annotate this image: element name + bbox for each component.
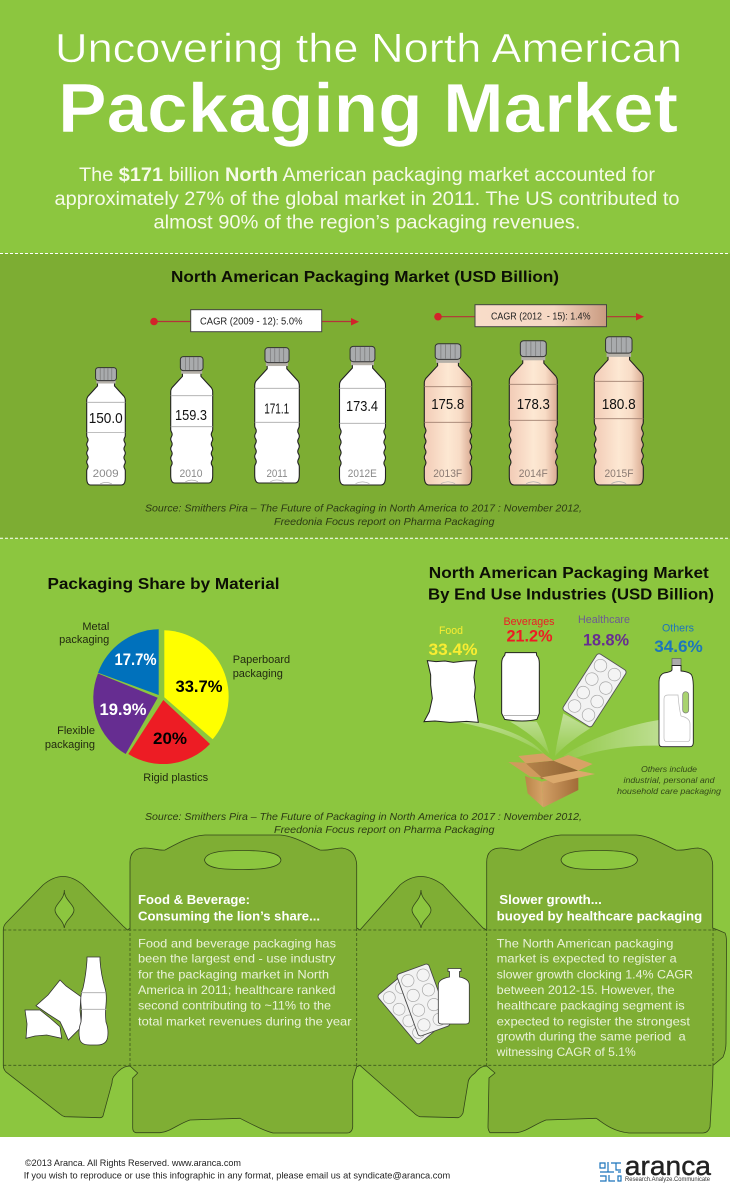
bottle: 2013F (424, 344, 472, 485)
footer (0, 1137, 730, 1200)
source note: market size (145, 502, 582, 528)
others category (654, 623, 703, 747)
bottle: 2013F: 175.8 (431, 396, 464, 413)
intro paragraph: The $171 billion North American packaging market accounted for (79, 165, 656, 186)
note: others include: industrial, personal and (624, 775, 716, 785)
title: Packaging Market (58, 69, 678, 147)
blister front (396, 963, 451, 1037)
icon: pillows and glass bottle (25, 957, 108, 1045)
slice: paperboard (164, 630, 229, 739)
heading: market size: North American Packaging Market (USD Billion) (171, 269, 559, 286)
bottle: 2012E: 2012E (348, 468, 377, 480)
heading: packaging share: Packaging Share by Material (48, 576, 280, 593)
bottle: 2010 (171, 357, 213, 483)
source note: material and end use: Freedonia Focus report on Pharma Packaging (274, 824, 495, 836)
arrow: CAGR 2012-15: CAGR (2012 - 15): 1.4% (491, 312, 591, 322)
pillow front (25, 1010, 62, 1038)
logo: aranca: Research.Analyze.Communicate (625, 1177, 711, 1183)
leaf cut-out left (55, 890, 74, 928)
text block: slower growth: healthcare packaging segment is (497, 998, 685, 1012)
pie chart: share by material: 17.7% (114, 650, 156, 669)
food category: 33.4% (428, 640, 478, 659)
blister back (377, 975, 443, 1045)
bottle: 2014F (509, 341, 557, 485)
pie chart: share by material (93, 629, 229, 764)
footer copyright (24, 1158, 450, 1181)
arrow: CAGR 2009-12: CAGR (2009 - 12): 5.0% (200, 316, 303, 328)
bottle: 2010: 159.3 (175, 407, 207, 424)
bottle: 2012E: 173.4 (346, 398, 378, 415)
bottle: 2015F: 180.8 (602, 396, 636, 413)
vial (438, 968, 469, 1024)
intro paragraph: approximately 27% of the global market in 2011. The US contributed to (54, 189, 680, 210)
icon: detergent bottle (659, 658, 693, 747)
bottle: 2009: 2009 (93, 468, 119, 480)
beverages category: 21.2% (506, 627, 552, 646)
handle cut-out left (204, 850, 281, 870)
pie chart: share by material: 20% (153, 729, 187, 748)
handle cut-out right (561, 850, 638, 870)
pie labels: Flexible (57, 725, 95, 737)
pie labels: packaging (59, 634, 109, 646)
panel: market size band (0, 254, 730, 538)
arrow: CAGR 2009-12 (150, 310, 359, 332)
bottle: 2014F: 178.3 (517, 396, 550, 413)
slice: rigid plastics (128, 700, 210, 764)
heading: end use industries (428, 565, 714, 604)
text block: food and beverage: been the largest end - use industry (138, 952, 336, 966)
intro paragraph: almost 90% of the region’s packaging revenues. (154, 212, 580, 234)
title: Uncovering the North American (55, 25, 682, 71)
text block: food and beverage: for the packaging market in North (138, 967, 329, 981)
pie chart: share by material: 19.9% (100, 700, 146, 719)
text block: slower growth: growth during the same period a (497, 1030, 686, 1044)
footer copyright: If you wish to reproduce or use this infographic in any format, please email us at syndicate@aranca.com (24, 1170, 450, 1181)
beverages category (502, 616, 555, 721)
pillow back (36, 980, 82, 1040)
intro paragraph (54, 165, 680, 234)
note: others include (617, 764, 721, 796)
healthcare category: 18.8% (583, 631, 629, 650)
text block: slower growth: The North American packaging (497, 936, 673, 950)
pie labels: Paperboard (233, 654, 290, 666)
healthcare category: Healthcare (578, 614, 630, 626)
text block: slower growth: expected to register the strongest (497, 1014, 691, 1028)
source note: market size: Source: Smithers Pira – The Future of Packaging in North America to 2017 : November 2012, (145, 502, 582, 514)
text block: slower growth: buoyed by healthcare packaging (497, 910, 702, 924)
food category: Food (439, 625, 463, 637)
panel: carton die-cut shapes (3, 835, 727, 1133)
bottle: 2014F: 2014F (519, 468, 548, 480)
text block: food and beverage: Food and beverage packaging has (138, 936, 336, 950)
title (55, 25, 682, 147)
source note: material and end use (145, 811, 582, 836)
bottle: 2009 (87, 368, 125, 485)
bottle: 2015F: 2015F (604, 468, 634, 480)
leaf cut-out right (412, 890, 431, 928)
pie labels (45, 621, 290, 784)
text block: food and beverage: America in 2011; healthcare ranked (138, 983, 336, 997)
bottle: 2015F (594, 337, 643, 485)
text block: slower growth: witnessing CAGR of 5.1% (496, 1045, 636, 1059)
logo: aranca: aranca (625, 1151, 712, 1181)
text block: slower growth: between 2012-15. However, the (497, 983, 675, 997)
slice: flexible (93, 674, 158, 754)
icon: blister packs and vial (377, 963, 469, 1045)
text block: food and beverage: total market revenues during the year (138, 1014, 352, 1028)
bottle: 2013F: 2013F (433, 468, 462, 480)
bottle: 2010: 2010 (180, 468, 202, 480)
pie chart: share by material: 33.7% (176, 677, 222, 696)
icon: blister pack (562, 653, 627, 728)
text block: slower growth (496, 893, 702, 1059)
arrow: CAGR 2012-15 (434, 305, 644, 327)
note: others include: household care packaging (617, 786, 721, 796)
text block: slower growth: market is expected to register a (497, 952, 677, 966)
heading: end use industries: By End Use Industries (USD Billion) (428, 586, 714, 604)
others category: Others (662, 623, 694, 635)
text block: food and beverage: Food & Beverage: (138, 893, 250, 907)
text block: slower growth: slower growth clocking 1.4% CAGR (497, 967, 693, 981)
pie labels: packaging (233, 668, 283, 680)
text block: food and beverage: second contributing to ~11% to the (138, 998, 331, 1012)
glass bottle (79, 957, 108, 1045)
pie labels: packaging (45, 739, 95, 751)
icon: can (502, 653, 539, 721)
text block: food and beverage: Consuming the lion’s share... (138, 910, 320, 924)
note: others include: Others include (641, 764, 697, 774)
bottle: 2011: 171.1 (264, 400, 289, 417)
healthcare category (562, 614, 630, 728)
text block: slower growth: Slower growth... (499, 893, 602, 907)
bottle: 2011: 2011 (266, 468, 288, 480)
others category: 34.6% (654, 637, 703, 656)
slice: metal (98, 629, 159, 695)
bottle: 2011 (255, 348, 299, 483)
pie labels: Rigid plastics (143, 772, 209, 784)
fold lines (3, 928, 718, 1066)
light rays from box (455, 713, 659, 759)
pie labels: Metal (82, 621, 109, 633)
food category (424, 625, 478, 722)
logo: aranca (600, 1151, 712, 1183)
footer copyright: ©2013 Aranca. All Rights Reserved. www.aranca.com (25, 1158, 241, 1169)
icon: food bag (424, 661, 478, 722)
carton outline (3, 835, 727, 1133)
source note: material and end use: Source: Smithers Pira – The Future of Packaging in North America to 2017 : November 2012, (145, 811, 582, 823)
beverages category: Beverages (504, 616, 555, 628)
text block: food and beverage (138, 893, 352, 1028)
bottle: 2012E (340, 346, 386, 485)
heading: end use industries: North American Packaging Market (429, 565, 710, 582)
icon: open cardboard box (508, 753, 595, 807)
bottle: 2009: 150.0 (89, 410, 123, 427)
source note: market size: Freedonia Focus report on Pharma Packaging (274, 516, 495, 528)
